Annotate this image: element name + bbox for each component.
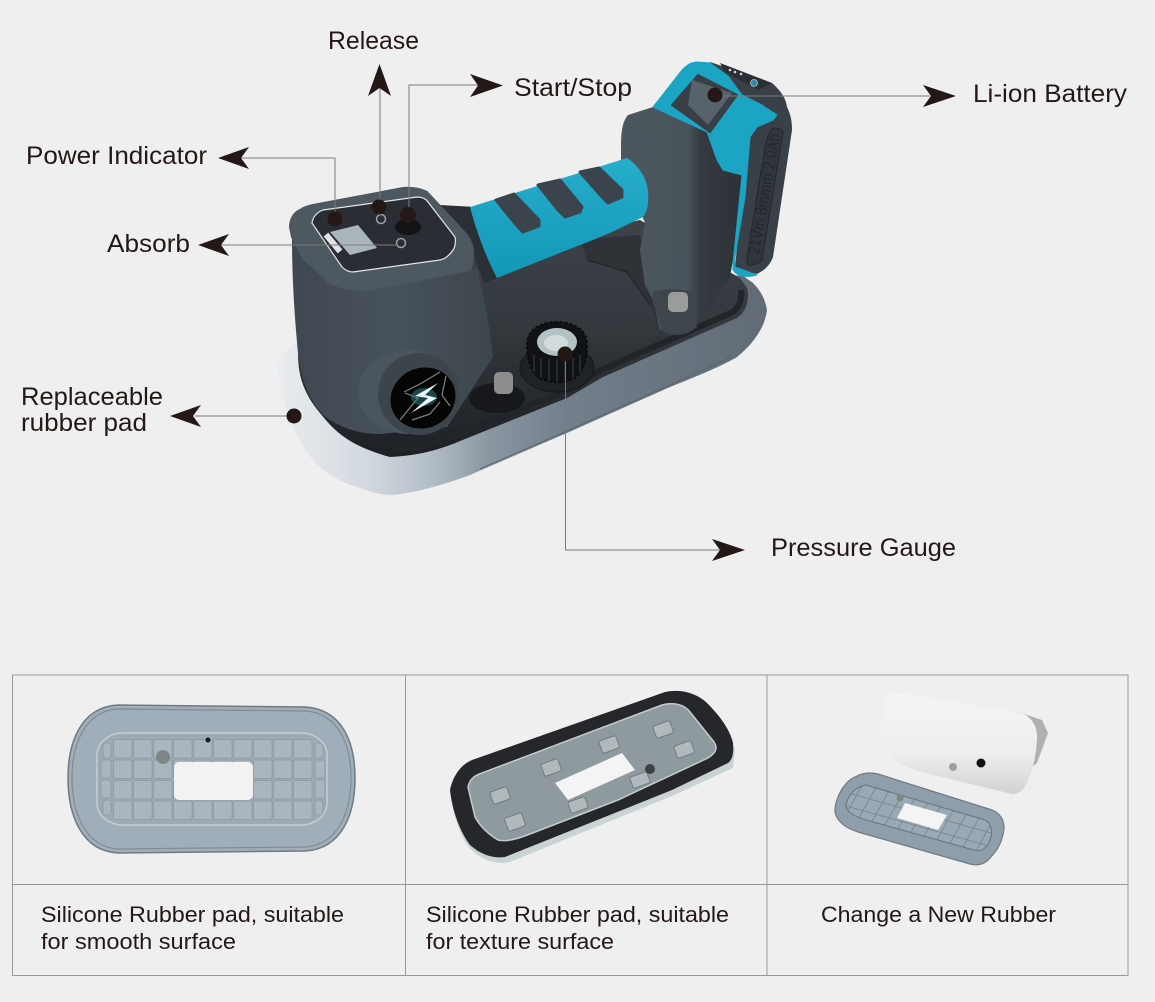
digital display xyxy=(330,225,377,255)
logo disc xyxy=(380,357,466,439)
battery embossed label xyxy=(747,128,783,265)
textured surface rubber pad xyxy=(450,691,735,863)
handle dark collar xyxy=(440,205,498,283)
arrow xyxy=(712,539,745,561)
gauge face xyxy=(537,328,577,356)
raised squares xyxy=(489,720,695,832)
battery blue frame xyxy=(653,62,777,276)
battery embossed text: 21Vm 8mmm 2.0Ah xyxy=(746,133,784,256)
gauge ribs xyxy=(534,355,580,382)
battery dark case xyxy=(710,62,792,274)
arrow xyxy=(170,405,201,427)
right edge cells xyxy=(315,743,325,815)
pad inner ridge xyxy=(97,733,327,825)
brand logo xyxy=(324,233,342,253)
rear housing xyxy=(621,107,742,330)
smooth surface rubber pad xyxy=(68,705,355,853)
dot xyxy=(372,200,386,214)
grip pad 2 xyxy=(538,180,582,217)
leader line xyxy=(409,85,480,215)
leader line xyxy=(220,244,398,246)
pad under layer xyxy=(452,697,735,863)
label: Replaceable xyxy=(21,383,163,411)
changing the rubber pad xyxy=(835,693,1048,865)
pad centre hole xyxy=(174,762,253,800)
leader line xyxy=(566,354,720,550)
handle blue grip xyxy=(470,158,648,278)
small pad ball xyxy=(896,794,904,802)
start stop button xyxy=(395,219,421,235)
plate hole xyxy=(976,758,986,768)
dot xyxy=(328,212,342,226)
motor housing xyxy=(358,350,460,434)
bracket outline xyxy=(587,260,650,305)
rubber pad xyxy=(278,275,767,495)
small pad xyxy=(835,773,1004,865)
arrow xyxy=(470,74,503,97)
gauge knob xyxy=(527,322,587,382)
caption: texture surface: for texture surface xyxy=(426,929,614,954)
small pad hole xyxy=(897,803,947,830)
callout: Power Indicator xyxy=(26,142,342,226)
callout: Pressure Gauge xyxy=(558,346,956,562)
dot xyxy=(286,408,302,424)
grip pad 3 xyxy=(580,168,622,203)
power level LEDs xyxy=(729,69,731,71)
battery xyxy=(653,62,792,276)
left edge cells xyxy=(101,743,111,815)
pad small hole xyxy=(206,738,210,742)
caption: texture surface: Silicone Rubber pad, suitable xyxy=(426,902,729,927)
motor cap with lightning logo xyxy=(358,350,466,439)
pad grid squares xyxy=(113,739,313,820)
caption: smooth surface xyxy=(41,902,344,954)
arrow xyxy=(198,234,229,256)
leader line xyxy=(195,415,294,417)
lightning arcs xyxy=(400,372,450,420)
label second line: rubber pad xyxy=(21,409,147,437)
leader line xyxy=(715,95,930,97)
metal body xyxy=(1018,712,1048,770)
dot xyxy=(558,346,572,362)
grip pad 1 xyxy=(496,194,539,232)
table grid xyxy=(12,675,1128,976)
pad rim ridge xyxy=(72,709,351,849)
dot xyxy=(708,88,722,102)
callout: Start/Stop xyxy=(400,74,632,223)
caption: smooth surface: for smooth surface xyxy=(41,929,236,954)
caption: smooth surface: Silicone Rubber pad, suitable xyxy=(41,902,344,927)
battery window inner xyxy=(688,80,732,125)
battery control window xyxy=(672,75,737,132)
inner well edge xyxy=(392,290,741,450)
comparison table xyxy=(12,675,1128,976)
lightning bolt xyxy=(411,383,438,413)
callout: Absorb xyxy=(107,230,398,258)
arrow xyxy=(368,64,391,96)
foam ring xyxy=(450,691,733,857)
pad outer xyxy=(68,705,355,853)
pad hole xyxy=(555,753,635,800)
dot xyxy=(400,207,416,223)
arrow xyxy=(923,85,956,107)
battery top panel xyxy=(720,63,772,90)
label: Absorb xyxy=(107,230,190,258)
screw recess xyxy=(645,764,655,774)
plate screw xyxy=(949,763,957,771)
white plate xyxy=(882,693,1037,794)
caption: texture surface xyxy=(426,902,729,954)
top cap xyxy=(290,188,473,290)
label: Li-ion Battery xyxy=(973,80,1128,108)
base plate xyxy=(298,220,748,457)
lightning glow xyxy=(411,388,437,406)
label: Power Indicator xyxy=(26,142,207,170)
rear foot xyxy=(653,289,697,335)
screw front xyxy=(469,372,525,413)
callout: Release xyxy=(328,27,419,214)
pad ball vent xyxy=(156,750,170,764)
gauge collar xyxy=(520,344,594,392)
label: Pressure Gauge xyxy=(771,534,956,562)
label: Start/Stop xyxy=(514,74,632,102)
pressure gauge xyxy=(520,322,594,392)
release indicator ring xyxy=(376,214,386,224)
arrow xyxy=(218,147,249,169)
rear foot bracket xyxy=(582,235,662,330)
label: Release xyxy=(328,27,419,55)
screw rear xyxy=(668,292,688,312)
front body xyxy=(292,237,493,434)
handle xyxy=(440,158,648,283)
rim lower edge xyxy=(480,358,730,469)
caption: change rubber: Change a New Rubber xyxy=(821,902,1057,927)
absorb indicator ring xyxy=(396,238,406,248)
pad inner plate xyxy=(468,704,716,841)
small pad grid xyxy=(846,785,992,851)
battery button xyxy=(750,80,758,86)
leader line xyxy=(379,80,381,207)
callout: Li-ion Battery xyxy=(708,80,1128,108)
leader line xyxy=(240,158,335,219)
control panel xyxy=(312,197,455,272)
motor ring xyxy=(378,353,460,435)
callout: Replaceable rubber pad xyxy=(21,383,302,437)
panel face xyxy=(312,197,455,272)
product illustration: vacuum suction cup xyxy=(278,62,792,495)
